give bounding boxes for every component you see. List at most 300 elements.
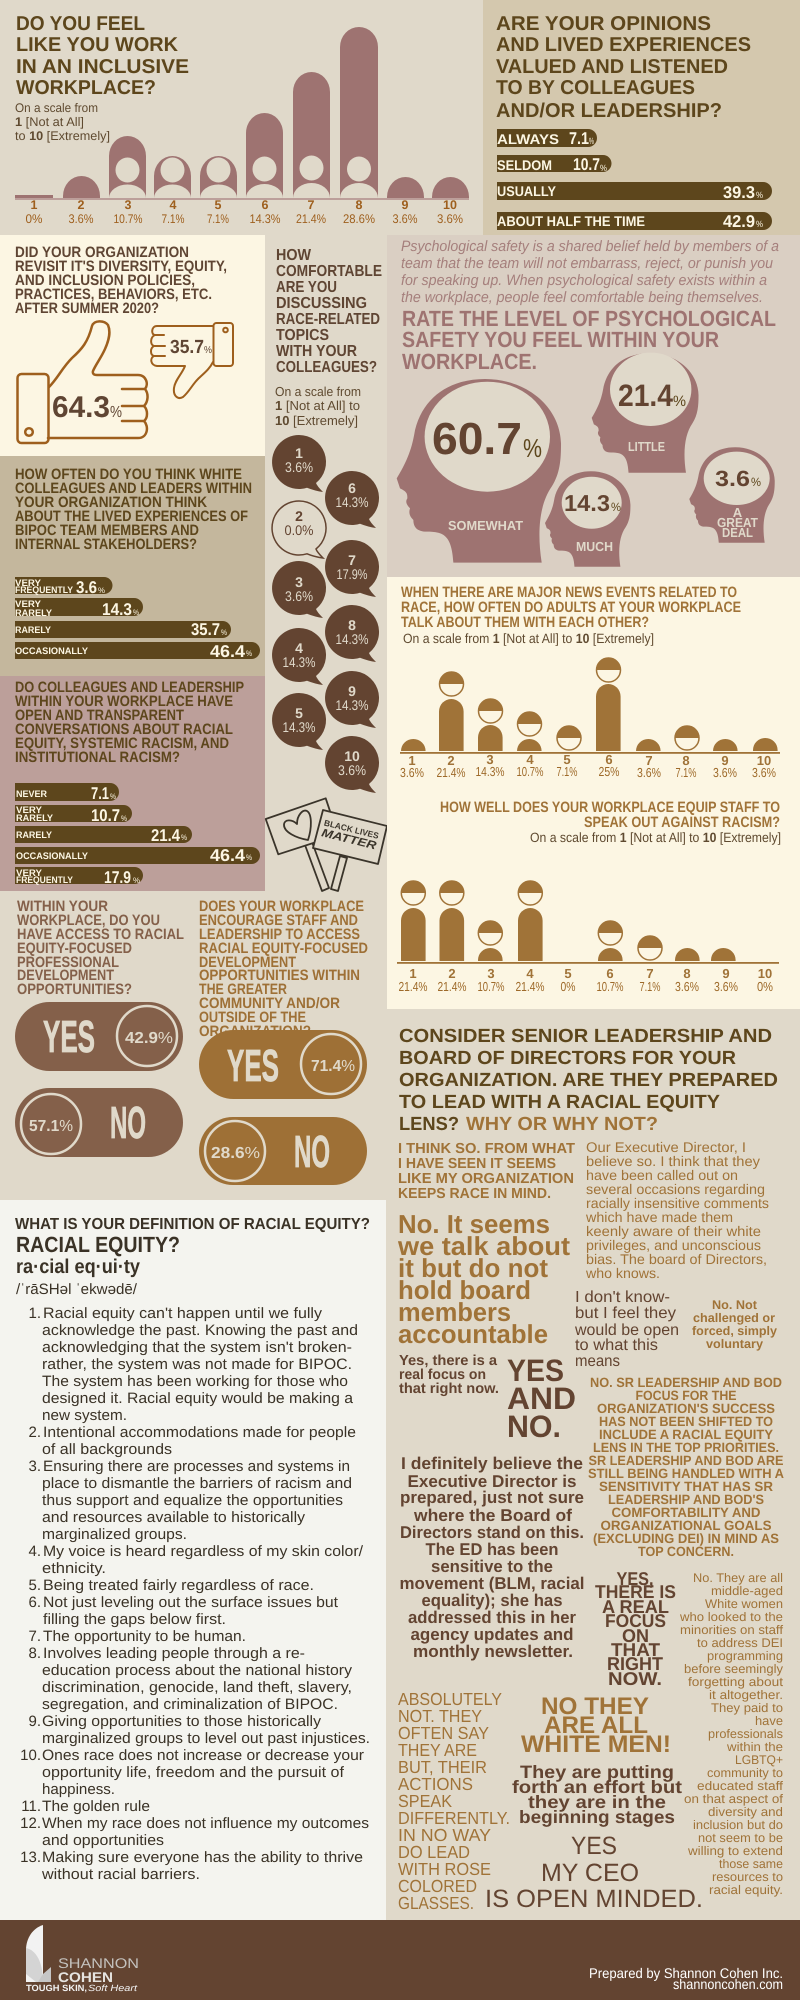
chart labels: 7.1% (162, 212, 184, 226)
bars: opinions valued: USUALLY (497, 183, 557, 199)
quote: I think so: I THINK SO. FROM WHAT (398, 1141, 575, 1157)
icon: head a great deal (689, 447, 775, 543)
heading: transparent conversations: WITHIN YOUR WORKPLACE HAVE (15, 693, 233, 710)
heading: senior leadership: WHY OR WHY NOT? (466, 1114, 658, 1135)
chart labels: news events: 3.6% (713, 765, 737, 780)
numbered list: 2. (28, 1424, 41, 1441)
bars: lived experiences: 46.4 (210, 642, 246, 661)
chart labels: news events: 7 (645, 753, 653, 768)
icon: head a great deal: DEAL (722, 525, 753, 540)
quote: I definitely believe: equality); she has (422, 1591, 562, 1610)
quote: absolutely not: COLORED (398, 1876, 477, 1896)
panel: opinions valued (483, 0, 800, 235)
quote: no it seems: it but do not (398, 1253, 548, 1283)
quote: no sr leadership: STILL BEING HANDLED WITH A (588, 1466, 784, 1481)
heading: speak out against racism (440, 799, 780, 831)
numbered list: place to dismantle the barriers of racism and (42, 1475, 352, 1492)
quote: middle-aged white women: inclusion but do (693, 1818, 783, 1832)
footer (0, 1920, 800, 2000)
numbered list: of all backgrounds (42, 1441, 172, 1458)
numbered list: Racial equity can't happen until we fully (43, 1305, 323, 1322)
bars: lived experiences: 14.3 (102, 600, 132, 619)
quote: absolutely not: NOT. THEY (398, 1706, 482, 1726)
chart labels: speak out: 6 (606, 966, 614, 981)
heading: senior leadership: ORGANIZATION. ARE THEY PREPARED (399, 1070, 778, 1091)
numbered list: Making sure everyone has the ability to thrive (42, 1849, 363, 1866)
chart labels: speak out: 10 (758, 966, 772, 981)
speech bubbles: 14.3% (336, 494, 368, 510)
quote: yes and no (507, 1353, 576, 1444)
quote: yes real focus: that right now. (399, 1381, 499, 1397)
bars: opinions valued: SELDOM (497, 157, 552, 173)
quote: yes there is a real focus (595, 1568, 676, 1689)
numbered list: and resources available to historically (42, 1509, 306, 1526)
heading: major news events: TALK ABOUT THEM WITH EACH OTHER? (401, 614, 649, 631)
heading: comfort discussing race: DISCUSSING (276, 295, 367, 312)
heading: encouraging development: OUTSIDE OF THE (199, 1009, 306, 1026)
heading: lived experiences: HOW OFTEN DO YOU THINK WHITE (15, 466, 242, 483)
heading: access to development: HAVE ACCESS TO RACIAL (17, 926, 184, 943)
quote: middle-aged white women (679, 1571, 784, 1897)
numbered list: The golden rule (42, 1798, 150, 1815)
bars: transparent conversations: RARELY (16, 813, 54, 824)
scale note: 1 [Not at All] (15, 115, 84, 129)
speech bubbles: 7 (348, 552, 356, 568)
chart labels: 1 (31, 198, 38, 212)
numbered list: opportunity life, freedom and the pursuit of (42, 1764, 345, 1781)
panel: definition of racial equity (0, 1200, 386, 1920)
numbered list: 3. (28, 1458, 41, 1475)
quote: absolutely not: OFTEN SAY (398, 1723, 489, 1743)
quote: absolutely not: GLASSES. (398, 1893, 474, 1913)
quote: no it seems: No. It seems (398, 1209, 550, 1239)
heading: opinions valued: AND/OR LEADERSHIP? (496, 100, 722, 122)
heading: encouraging development: RACIAL EQUITY-FOCUSED (199, 940, 368, 957)
icon: head a great deal: 3.6 (715, 466, 750, 491)
pill: no 57.1: NO (110, 1097, 146, 1148)
heading: access to development: DEVELOPMENT (17, 967, 114, 984)
quote: I don't know: but I feel they (575, 1305, 676, 1322)
speech bubbles (272, 435, 379, 793)
numbered list: 12. (20, 1815, 41, 1832)
quote: middle-aged white women: No. They are all (693, 1571, 783, 1585)
heading: transparent conversations: INSTITUTIONAL RACISM? (15, 749, 180, 766)
bars: lived experiences: % (246, 649, 252, 658)
heading: DEI policies: REVISIT IT'S DIVERSITY, EQUITY, (15, 258, 227, 275)
speech bubbles: 2 (295, 508, 303, 524)
quote: I think so: KEEPS RACE IN MIND. (398, 1186, 551, 1202)
chart labels: speak out: 7 (646, 966, 654, 981)
bars: opinions valued: % (756, 190, 763, 200)
icon: head somewhat: 60.7 (432, 413, 522, 464)
heading: DEI policies: DID YOUR ORGANIZATION (15, 244, 189, 261)
heading: inclusive workplace (16, 13, 189, 99)
definition text: the workplace, people feel comfortable being themselves. (401, 289, 763, 306)
quote: absolutely not: THEY ARE (398, 1740, 477, 1760)
pill: yes 71.4 (199, 1030, 367, 1099)
pill: no 28.6: NO (294, 1126, 330, 1177)
heading: major news events: RACE, HOW OFTEN DO ADULTS AT YOUR WORKPLACE (401, 599, 741, 616)
quote: yes my ceo: IS OPEN MINDED. (485, 1885, 703, 1913)
quote: no sr leadership: HAS NOT BEEN SHIFTED TO (599, 1414, 773, 1429)
heading: definition: RACIAL EQUITY? (16, 1232, 180, 1257)
quote: our executive director: have been called out on (586, 1167, 738, 1183)
chart labels: news events: 10 (757, 753, 771, 768)
icon: head somewhat (397, 379, 561, 563)
speech bubbles: 14.3% (336, 631, 368, 647)
quote: no it seems (397, 1209, 570, 1349)
quote: our executive director (585, 1139, 769, 1281)
quote: I think so: I HAVE SEEN IT SEEMS (398, 1156, 556, 1172)
heading: encouraging development: COMMUNITY AND/OR (199, 995, 340, 1012)
quote: yes there is a real focus: YES, (616, 1568, 654, 1589)
numbered list: and opportunities (42, 1832, 164, 1849)
heading: access to development: WORKPLACE, DO YOU (17, 912, 160, 929)
quote: no they are all white men: ARE ALL (544, 1712, 648, 1739)
numbered list: My voice is heard regardless of my skin color/ (43, 1543, 364, 1560)
heading: comfort discussing race (276, 247, 382, 376)
64.3 percent: % (110, 404, 122, 421)
heading: encouraging development (199, 898, 368, 1040)
numbered list: Not just leveling out the surface issues but (43, 1594, 339, 1611)
panel: comfort discussing race (272, 247, 382, 793)
speech bubbles: 3.6% (285, 459, 313, 475)
heading: rate psychological safety: WORKPLACE. (402, 349, 537, 374)
quote: I definitely believe: Directors stand on this. (400, 1523, 584, 1542)
quote: I don't know: I don't know- (575, 1289, 670, 1306)
chart labels: 3.6% (437, 212, 463, 226)
quote: middle-aged white women: have (755, 1714, 783, 1728)
64.3 percent: 64.3 (52, 391, 110, 424)
quote: no sr leadership: (EXCLUDING DEI) IN MIND AS (593, 1531, 779, 1546)
heading: comfort discussing race: TOPICS (276, 327, 329, 344)
numbered list: thus support and equalize the opportunities (42, 1492, 343, 1509)
chart labels: 7.1% (207, 212, 229, 226)
heading: lived experiences: YOUR ORGANIZATION THINK (15, 494, 207, 511)
heading: transparent conversations: OPEN AND TRANSPARENT (15, 707, 184, 724)
numbered list: education process about the national history (42, 1662, 353, 1679)
quote: yes there is a real focus: ON (622, 1625, 649, 1646)
bars: lived experiences: OCCASIONALLY (15, 646, 89, 657)
quote: I don't know: would be open (574, 1322, 679, 1339)
quote: I definitely believe: The ED has been (426, 1540, 558, 1559)
quote: I don't know (574, 1289, 679, 1370)
numbered list: acknowledging that the system isn't broken- (42, 1339, 352, 1356)
quote: our executive director: bias. The board of Directors, (586, 1251, 767, 1267)
bars: lived experiences: VERY (15, 599, 42, 610)
chart labels: speak out: 21.4% (438, 979, 467, 994)
chart labels: 10 (443, 198, 457, 212)
heading: opinions valued: VALUED AND LISTENED (496, 56, 728, 78)
quote: no not challenged: voluntary (706, 1337, 763, 1351)
pill: no 28.6 (199, 1117, 367, 1185)
pill: yes 71.4: 71.4% (311, 1058, 355, 1075)
heading: rate psychological safety (402, 306, 776, 374)
chart labels: speak out: 3.6% (714, 979, 738, 994)
heading: inclusive workplace: WORKPLACE? (16, 77, 156, 99)
scale note (275, 384, 361, 428)
bars: transparent conversations: FREQUENTLY (16, 875, 74, 886)
quote: yes and no: AND (507, 1381, 576, 1416)
quote: absolutely not: ABSOLUTELY (398, 1689, 502, 1709)
quote: no sr leadership: SENSITIVITY THAT HAS SR (599, 1479, 773, 1494)
quote: I definitely believe: agency updates and (410, 1625, 574, 1644)
numbered list: 5. (28, 1577, 41, 1594)
numbered list: designed it. Racial equity would be making a (42, 1390, 354, 1407)
bars: lived experiences: VERY (15, 578, 42, 589)
quote: I definitely believe: where the Board of (413, 1506, 572, 1525)
bars: opinions valued: ABOUT HALF THE TIME (497, 213, 645, 229)
logo: Shannon Cohen: COHEN (58, 1969, 113, 1985)
bars: transparent conversations: % (133, 876, 140, 885)
numbered list: Ones race does not increase or decrease your (42, 1747, 364, 1764)
bars: transparent conversations: 10.7 (91, 806, 120, 825)
chart labels: news events: 3 (486, 752, 494, 767)
pill: yes 42.9: 42.9% (125, 1030, 173, 1047)
quote: yes and no: YES (507, 1353, 564, 1388)
bars: opinions valued: 39.3 (723, 183, 755, 202)
quote: middle-aged white women: on that aspect of (684, 1792, 784, 1806)
icon: head little: LITTLE (628, 439, 665, 454)
quote: absolutely not: DIFFERENTLY. (398, 1808, 510, 1828)
quote: yes there is a real focus: NOW. (608, 1668, 662, 1689)
chart labels: speak out: 10.7% (478, 979, 505, 994)
heading: senior leadership: LENS? (399, 1114, 459, 1135)
heading: comfort discussing race: COMFORTABLE (276, 263, 382, 280)
numbered list: discrimination, genocide, land theft, slavery, (42, 1679, 352, 1696)
quote: no it seems: members (398, 1297, 511, 1327)
chart labels (26, 198, 463, 226)
icon: head little: 21.4 (618, 378, 674, 413)
numbered list: filling the gaps below first. (43, 1611, 226, 1628)
logo: Shannon Cohen: SHANNON (58, 1955, 139, 1971)
bars: transparent conversations: VERY (16, 805, 43, 816)
quote: absolutely not: BUT, THEIR (398, 1757, 487, 1777)
icon: protest signs: MATTER (320, 827, 378, 853)
bars: transparent conversations: VERY (16, 868, 43, 879)
bars: opinions valued: 7.1 (569, 129, 589, 148)
quote: absolutely not (398, 1689, 510, 1913)
35.7 percent: % (204, 345, 212, 356)
quote: our executive director: Our Executive Director, I (586, 1139, 746, 1155)
quote: no sr leadership: SR LEADERSHIP AND BOD ARE (588, 1453, 784, 1468)
speech bubbles: 6 (348, 480, 356, 496)
chart labels: 21.4% (296, 212, 326, 226)
scale note: On a scale from 1 [Not at All] to 10 [Extremely] (530, 830, 781, 845)
chart labels: news events (400, 752, 776, 780)
chart labels: speak out: 10.7% (596, 979, 624, 994)
quote: putting forth an effort (512, 1762, 682, 1827)
numbered list: 7. (28, 1628, 41, 1645)
quote: no not challenged: challenged or (693, 1311, 775, 1325)
chart labels: news events: 3.6% (752, 765, 776, 780)
chart labels: 10.7% (114, 212, 142, 226)
heading: access to development: PROFESSIONAL (17, 954, 119, 971)
icon: thumbs down (151, 323, 233, 398)
bars: transparent conversations: 17.9 (104, 868, 131, 887)
chart labels: speak out: 3.6% (675, 979, 699, 994)
chart labels: news events: 10.7% (516, 764, 544, 779)
heading: definition: WHAT IS YOUR DEFINITION OF RACIAL EQUITY? (15, 1216, 370, 1233)
chart labels: 9 (402, 198, 409, 212)
quote: I think so (398, 1141, 575, 1202)
pill: yes 71.4: YES (227, 1040, 279, 1091)
bars: transparent conversations: % (110, 792, 116, 801)
numbered list: marginalized groups to level out past injustices. (42, 1730, 370, 1747)
credit (589, 1965, 783, 1992)
heading: definition: /ˈrāSHəl ˈekwədē/ (16, 1281, 138, 1298)
scale note: to 10 [Extremely] (15, 129, 110, 143)
quote: no sr leadership (588, 1375, 784, 1559)
quote: yes there is a real focus: THERE IS (595, 1581, 676, 1602)
definition text: Psychological safety is a shared belief held by members of a (401, 238, 779, 255)
chart labels: news events: 9 (721, 753, 729, 768)
panel: psychological safety (387, 235, 800, 577)
bars: lived experiences: % (133, 608, 139, 617)
chart labels: 3.6% (392, 212, 418, 226)
numbered list: 11. (21, 1798, 41, 1815)
quote: putting forth an effort: They are putting (520, 1762, 674, 1782)
scale note: On a scale from (15, 101, 98, 115)
chart labels: speak out (398, 966, 773, 994)
quote: no sr leadership: LEADERSHIP AND BOD'S (608, 1492, 764, 1507)
chart labels: speak out: 2 (448, 966, 456, 981)
quote: yes my ceo: MY CEO (541, 1859, 639, 1887)
panel: senior leadership quotes (397, 1026, 784, 1913)
heading: access to development (17, 898, 184, 998)
quote: yes there is a real focus: THAT (611, 1639, 661, 1660)
quote: middle-aged white women: programming (707, 1649, 783, 1663)
chart labels: news events: 6 (605, 752, 613, 767)
heading: major news events: WHEN THERE ARE MAJOR NEWS EVENTS RELATED TO (401, 584, 737, 601)
people chart: speak out (397, 881, 779, 964)
quote: no sr leadership: FOCUS FOR THE (636, 1388, 736, 1403)
heading: DEI policies: AFTER SUMMER 2020? (15, 300, 159, 317)
heading: opinions valued: ARE YOUR OPINIONS (496, 13, 711, 35)
heading: encouraging development: ENCOURAGE STAFF AND (199, 912, 358, 929)
quote: middle-aged white women: They paid to (711, 1701, 783, 1715)
bars: transparent conversations: % (181, 833, 187, 842)
quote: our executive director: who knows. (585, 1265, 660, 1281)
pill: no 28.6: 28.6% (211, 1145, 260, 1162)
heading: senior leadership: BOARD OF DIRECTORS FOR YOUR (399, 1048, 736, 1069)
heading: encouraging development: DEVELOPMENT (199, 954, 296, 971)
speech bubbles: 5 (295, 705, 303, 721)
heading: opinions valued: AND LIVED EXPERIENCES (496, 34, 751, 56)
bars: transparent conversations: 46.4 (210, 846, 246, 865)
speech bubbles: 3 (295, 574, 303, 590)
quote: yes real focus (399, 1353, 499, 1397)
heading: lived experiences: ABOUT THE LIVED EXPERIENCES OF (15, 508, 248, 525)
quote: I think so: LIKE MY ORGANIZATION (398, 1171, 574, 1187)
quote: I definitely believe: sensitive to the (431, 1557, 553, 1576)
heading: transparent conversations: EQUITY, SYSTEMIC RACISM, AND (15, 735, 229, 752)
panel: lived experiences frequency (0, 456, 265, 676)
numbered list: 13. (20, 1849, 41, 1866)
quote: no sr leadership: NO. SR LEADERSHIP AND BOD (590, 1375, 782, 1390)
quote: our executive director: privileges, and unconscious (586, 1237, 761, 1253)
chart labels: 8 (356, 198, 363, 212)
panel: news events and speaking out (387, 577, 800, 1009)
quote: no they are all white men (521, 1693, 671, 1758)
numbered list: 1. (28, 1305, 41, 1322)
heading: comfort discussing race: HOW (276, 247, 312, 264)
icon: head somewhat: SOMEWHAT (448, 518, 523, 533)
speech bubbles: 17.9% (336, 566, 368, 582)
speech bubbles: 3.6% (338, 762, 366, 778)
numbered list: Intentional accommodations made for people (43, 1424, 356, 1441)
pill: yes 42.9: YES (43, 1011, 95, 1062)
chart labels: 3 (125, 198, 132, 212)
chart labels: speak out: 1 (409, 966, 417, 981)
chart labels: speak out: 0% (757, 979, 773, 994)
quote: middle-aged white women: those same (719, 1857, 783, 1871)
quote: middle-aged white women: professionals (708, 1727, 783, 1741)
quote: absolutely not: WITH ROSE (398, 1859, 491, 1879)
numbered list: marginalized groups. (42, 1526, 187, 1543)
quote: I definitely believe: monthly newsletter. (413, 1642, 573, 1661)
quote: yes and no: NO. (507, 1409, 561, 1444)
chart labels: news events: 2 (447, 753, 455, 768)
chart labels: speak out: 0% (560, 979, 576, 994)
numbered list: The system has been working for those who (42, 1373, 348, 1390)
icon: head somewhat: % (523, 433, 542, 463)
bars: transparent conversations: RARELY (16, 830, 53, 841)
heading: encouraging development: DOES YOUR WORKPLACE (199, 898, 364, 915)
panel: encouraging development (199, 898, 368, 1185)
heading: comfort discussing race: COLLEAGUES? (276, 359, 377, 376)
speech bubbles: 9 (348, 683, 356, 699)
speech bubbles: 0.0% (284, 522, 314, 538)
icon: head a great deal: GREAT (717, 515, 758, 530)
quote: no not challenged: No. Not (712, 1298, 758, 1312)
panel: inclusive workplace (0, 0, 483, 235)
numbered list: new system. (42, 1407, 127, 1424)
quote: no sr leadership: LENS IN THE TOP PRIORITIES. (593, 1440, 779, 1455)
heading: encouraging development: LEADERSHIP TO ACCESS (199, 926, 360, 943)
quote: middle-aged white women: educated staff (697, 1779, 784, 1793)
bars: lived experiences (15, 577, 260, 661)
chart labels: 6 (262, 198, 269, 212)
quote: middle-aged white women: forgetting about (688, 1675, 784, 1689)
bars: lived experiences: 35.7 (191, 620, 220, 639)
quote: middle-aged white women: community to (707, 1766, 783, 1780)
numbered list: Ensuring there are processes and systems in (43, 1458, 350, 1475)
heading: inclusive workplace: LIKE YOU WORK (16, 34, 179, 56)
chart labels: news events: 7.1% (556, 764, 578, 779)
chart labels: speak out: 4 (526, 966, 534, 981)
icon: head much: % (611, 500, 621, 514)
heading: inclusive workplace: DO YOU FEEL (16, 13, 145, 35)
quote: I definitely believe: movement (BLM, racial (400, 1574, 584, 1593)
chart labels: news events: 5 (563, 752, 571, 767)
chart labels: speak out: 21.4% (516, 979, 545, 994)
quote: I don't know: to what this (575, 1337, 658, 1354)
heading: transparent conversations (15, 679, 244, 766)
chart labels: 14.3% (250, 212, 280, 226)
quote: our executive director: several occasions regarding (586, 1181, 765, 1197)
quote: middle-aged white women: within the (726, 1740, 783, 1754)
scale note: 1 [Not at All] to (275, 398, 360, 413)
heading: access to development: WITHIN YOUR (17, 898, 108, 915)
bars: lived experiences: RARELY (15, 608, 53, 619)
logo: Shannon Cohen: TOUGH SKIN, (26, 1983, 87, 1993)
definition text: team that the team will not embarrass, reject, or punish you (401, 255, 774, 272)
numbered list: 9. (28, 1713, 41, 1730)
chart labels: speak out: 7.1% (640, 979, 661, 994)
chart labels: 4 (170, 198, 177, 212)
quote: middle-aged white women: racial equity. (709, 1883, 783, 1897)
